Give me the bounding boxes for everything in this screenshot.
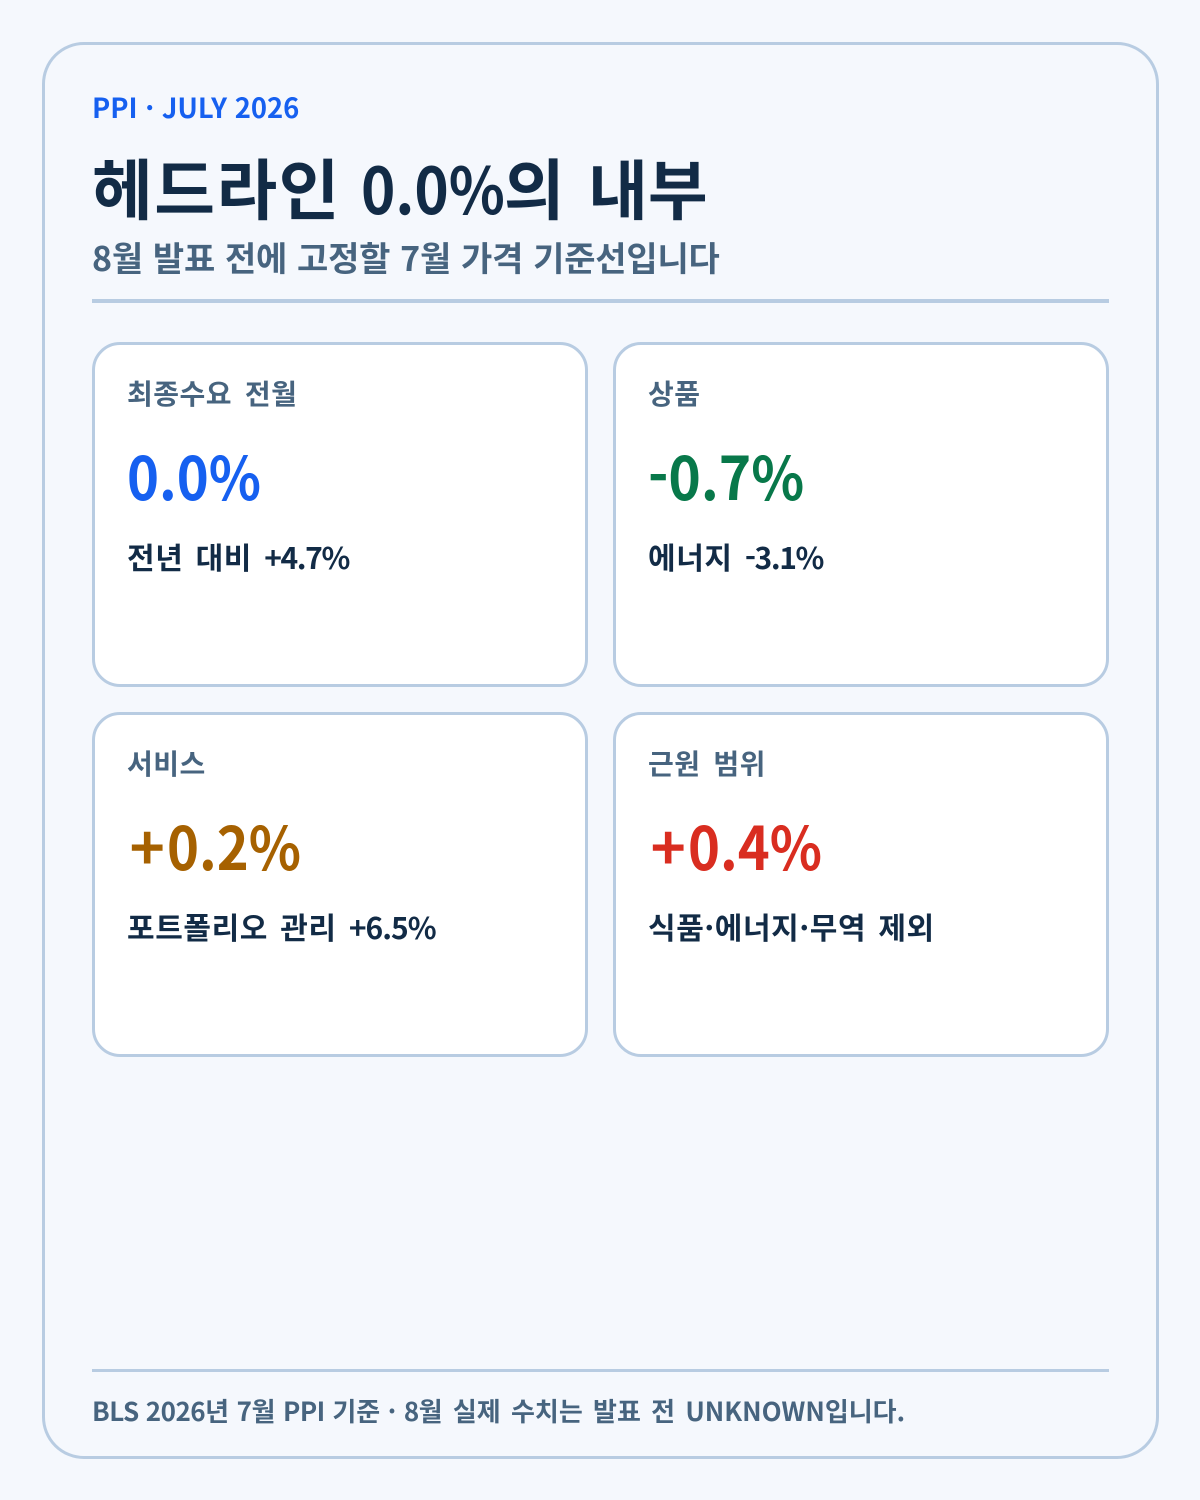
detail: year over year: 전년 대비 +4.7% [127,534,349,578]
title: 0.0% [361,141,505,233]
value: -0.7%: -0.7% [648,431,804,518]
detail: excluding food, energy, trade: 식품·에너지·무역 제외 [648,904,935,948]
detail: portfolio management: 포트폴리오 관리 +6.5% [127,904,436,948]
detail: energy: 에너지 -3.1% [648,534,823,578]
footer source note: BLS 2026년 7월 PPI 기준 · 8월 실제 수치는 발표 전 UNKNOWN입니다. [92,1392,905,1429]
value: +0.4%: + [650,801,686,888]
value: 0.0%: 0.0% [126,431,261,518]
label: core range: 근원 범위 [648,743,766,783]
value: +0.2%: + [130,801,165,888]
label: goods: 상품 [648,373,701,413]
title: 헤드라인 의 내부 [92,138,708,234]
panel: core range [613,712,1109,1057]
header divider [92,299,1109,303]
label: final demand: 최종수요 전월 [127,373,297,413]
panel: services [92,712,588,1057]
panel: final demand [92,342,588,687]
value: +0.4%: 0.4% [688,801,822,888]
value: +0.2%: 0.2% [167,801,301,888]
footer divider [92,1369,1109,1372]
label: services: 서비스 [127,743,206,783]
subtitle: 8월 발표 전에 고정할 7월 가격 기준선입니다 [92,232,720,281]
panel: goods [613,342,1109,687]
eyebrow: PPI July 2026: PPI · JULY 2026 [92,86,299,126]
